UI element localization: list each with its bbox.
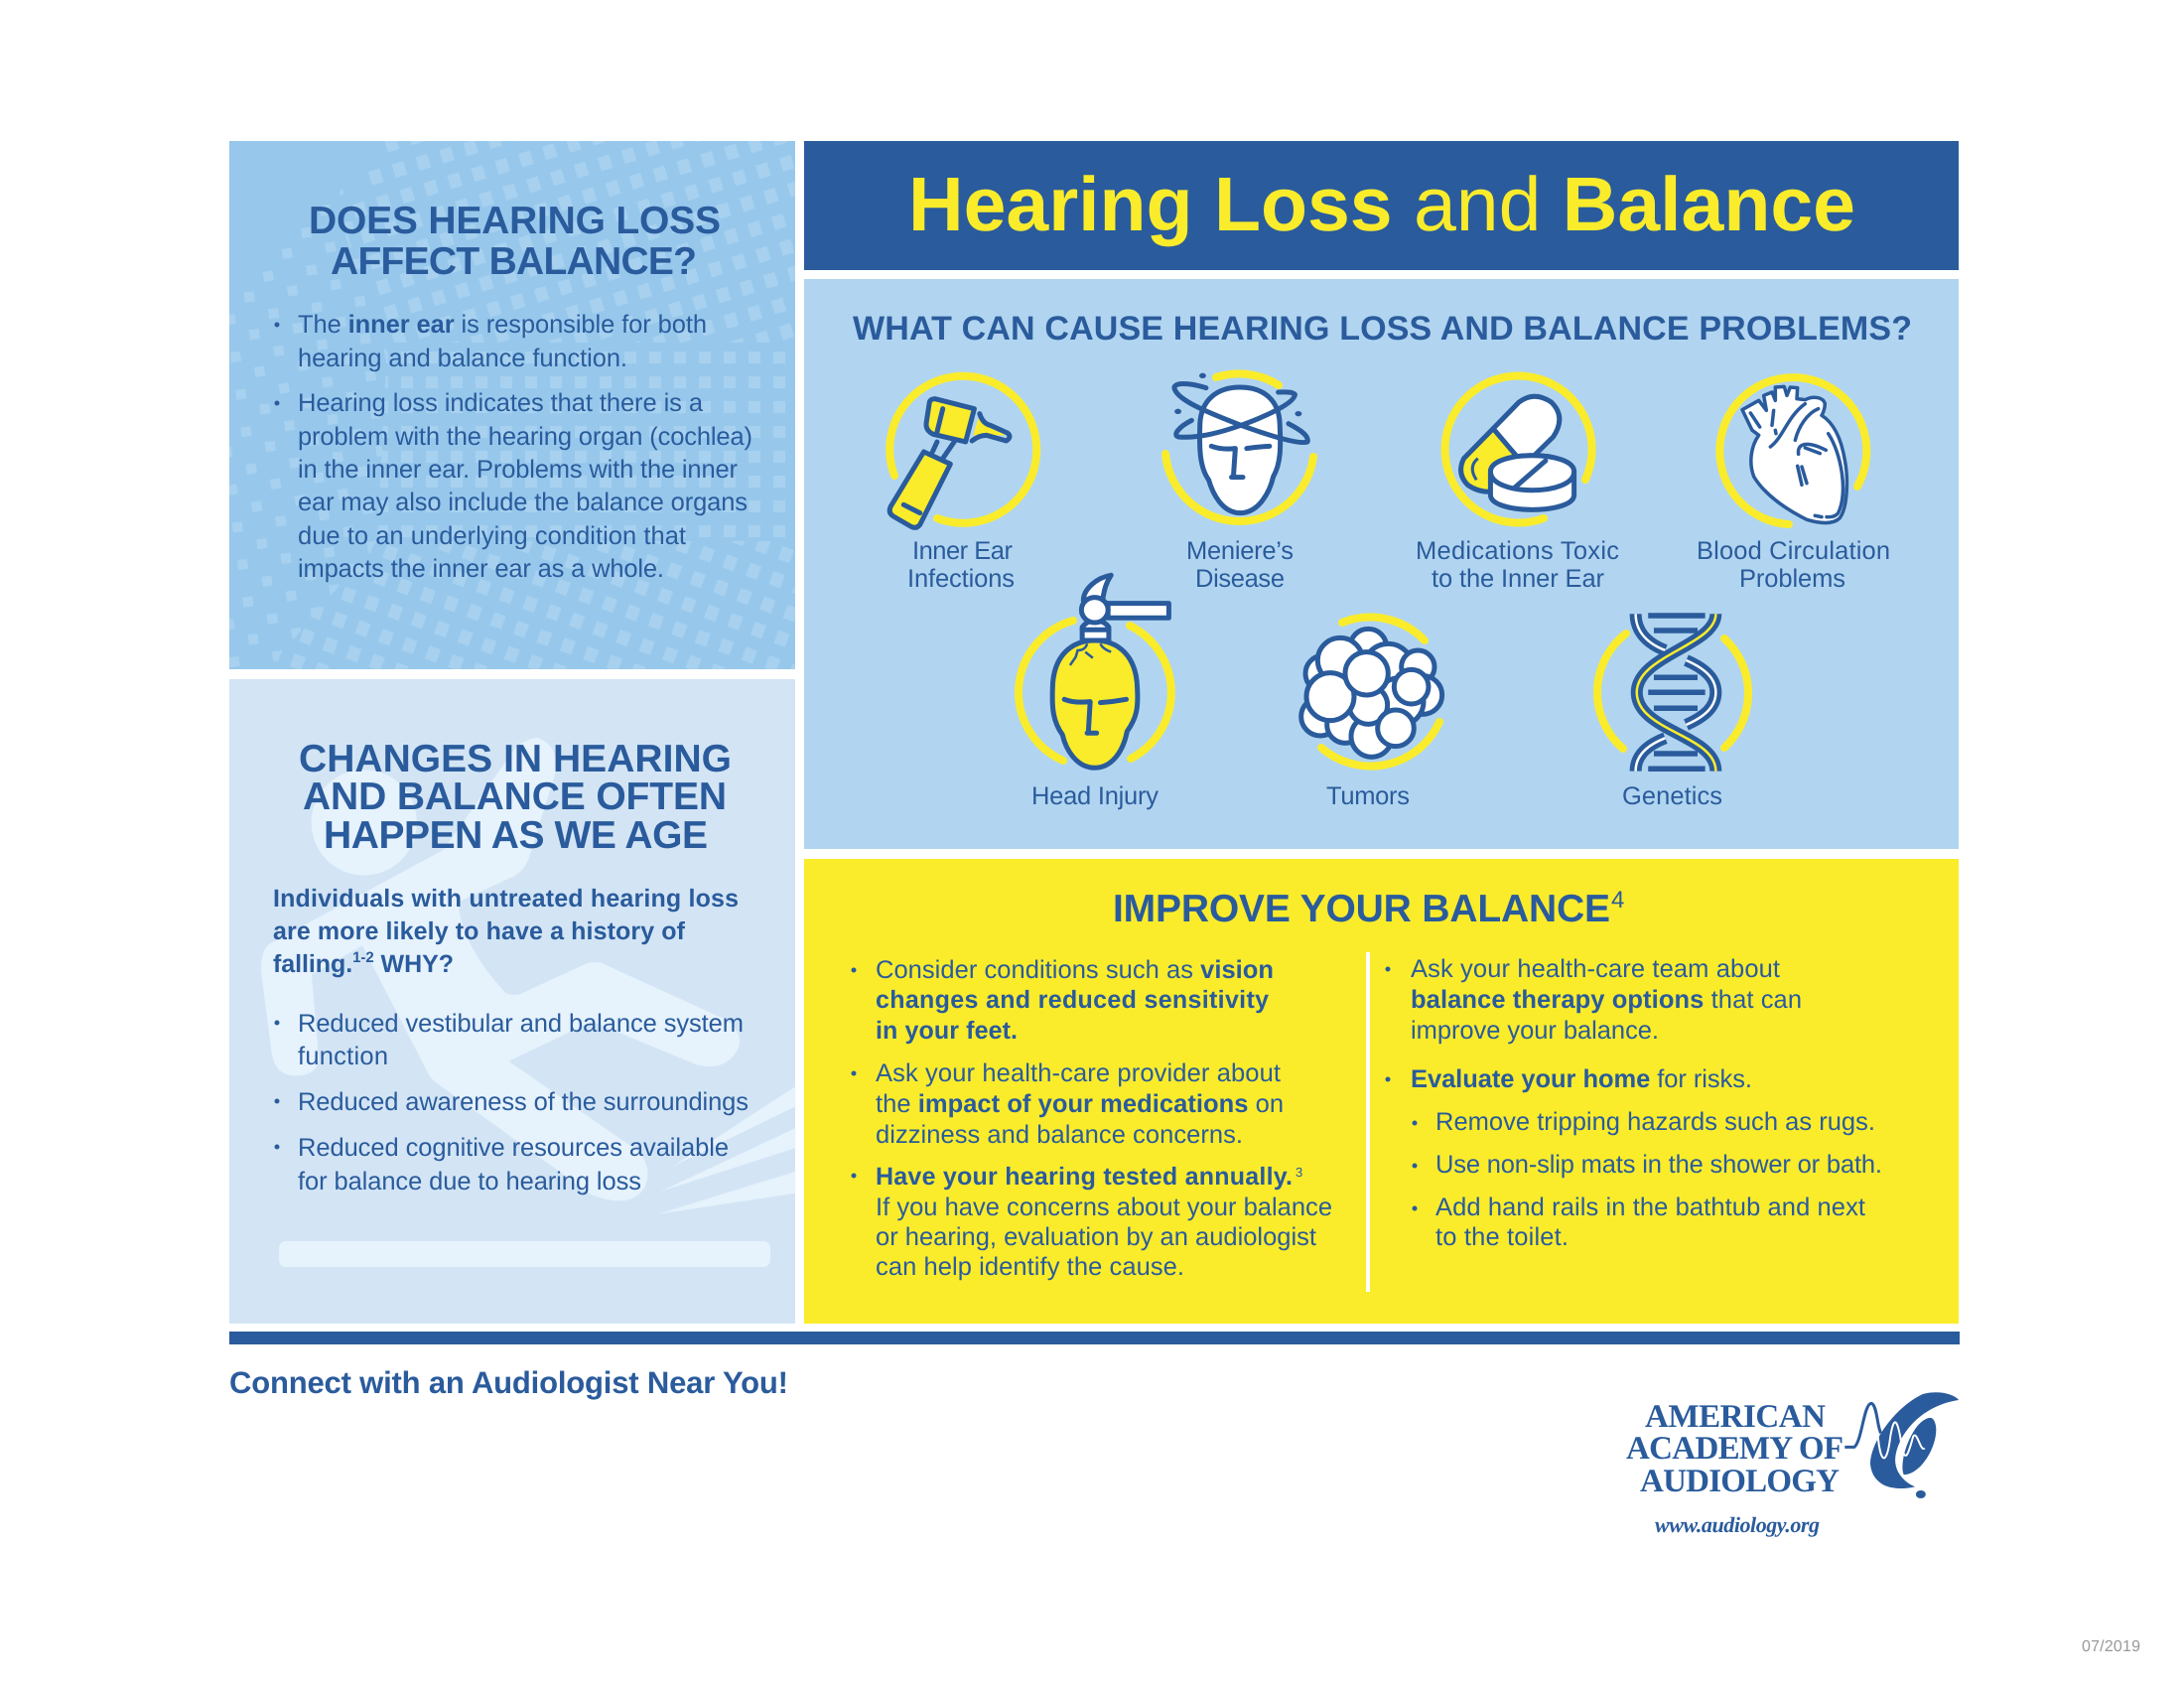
text block: left column bullets: Have your hearing tested annually.: [876, 1163, 1293, 1191]
text block: individuals with untreated hearing loss: WHY?: [374, 950, 454, 978]
text block: right column bullets: Add hand rails in the bathtub and next: [1435, 1194, 1865, 1221]
text block: right column bullets: Use non-slip mats in the shower or bath.: [1435, 1151, 1882, 1179]
text block: left column bullets: [852, 956, 1332, 1281]
text block: right column bullets: balance therapy options that can: [1411, 986, 1802, 1014]
text block: left column bullets: Consider conditions such as vision: [876, 956, 1274, 984]
text block: right column bullets: [1386, 955, 1882, 1251]
heading: improve your balance: 4: [1611, 887, 1624, 914]
call to action: Connect with an Audiologist Near You!: [229, 1365, 788, 1400]
text block: left column bullets: If you have concerns about your balance: [876, 1194, 1332, 1221]
text block: left column bullets: can help identify the cause.: [876, 1253, 1184, 1281]
heading: changes in hearing: HAPPEN AS WE AGE: [324, 814, 708, 857]
heading: changes in hearing: AND BALANCE OFTEN: [303, 775, 727, 818]
text block: left column bullets: dizziness and balance concerns.: [876, 1121, 1243, 1149]
text block: inner ear bullets: ear may also include the balance organs: [298, 489, 748, 516]
text block: individuals with untreated hearing loss: [273, 885, 739, 978]
text block: reasons bullets: Reduced awareness of the surroundings: [298, 1088, 749, 1116]
text block: right column bullets: improve your balance.: [1411, 1017, 1659, 1045]
label: menieres disease: Meniere’s: [1186, 537, 1294, 565]
label: medications toxic: [1416, 537, 1619, 593]
text block: inner ear bullets: [274, 311, 752, 583]
label: inner ear infections: [907, 537, 1015, 593]
text block: inner ear bullets: The inner ear is responsible for both: [298, 311, 707, 339]
icon: head injury: [1019, 575, 1171, 768]
logo: american academy of audiology: AMERICAN: [1645, 1399, 1826, 1435]
text block: reasons bullets: Reduced cognitive resources available: [298, 1134, 729, 1162]
label: medications toxic: to the Inner Ear: [1432, 565, 1604, 593]
date stamp: 07/2019: [2082, 1638, 2140, 1655]
text block: left column bullets: the impact of your medications on: [876, 1090, 1284, 1118]
heading: does hearing loss: AFFECT BALANCE?: [331, 240, 697, 283]
heading: does hearing loss: [309, 200, 721, 283]
text block: left column bullets: or hearing, evaluation by an audiologist: [876, 1223, 1316, 1251]
icon: falling person background: [261, 738, 795, 1267]
text block: left column bullets: in your feet.: [876, 1017, 1018, 1045]
label: menieres disease: Disease: [1195, 565, 1285, 593]
text block: left column bullets: 3: [1296, 1165, 1302, 1180]
title banner: [804, 141, 1959, 270]
text block: inner ear bullets: in the inner ear. Problems with the inner: [298, 456, 739, 484]
label: blood circulation problems: Problems: [1739, 565, 1845, 593]
label: genetics: Genetics: [1622, 782, 1722, 810]
heading: improve your balance: IMPROVE YOUR BALANCE: [1113, 888, 1610, 930]
text block: left column bullets: Ask your health-care provider about: [876, 1059, 1281, 1087]
panel: improve your balance: [804, 859, 1959, 1324]
logo: american academy of audiology: AUDIOLOGY: [1640, 1464, 1840, 1499]
text block: left column bullets: changes and reduced sensitivity: [876, 986, 1269, 1014]
text block: right column bullets: Remove tripping hazards such as rugs.: [1435, 1108, 1875, 1136]
logo: american academy of audiology: [1626, 1392, 1959, 1537]
text block: individuals with untreated hearing loss: falling.: [273, 950, 352, 978]
text block: individuals with untreated hearing loss: 1-2: [352, 949, 374, 966]
icon: heart: [1719, 377, 1866, 524]
icon: dna: [1597, 614, 1748, 772]
text block: reasons bullets: for balance due to hearing loss: [298, 1168, 641, 1196]
heading: changes in hearing: [299, 738, 732, 857]
icon: otoscope: [889, 376, 1036, 527]
panel: changes in hearing and balance: [229, 679, 795, 1324]
text block: reasons bullets: function: [298, 1043, 388, 1070]
text block: inner ear bullets: Hearing loss indicates that there is a: [298, 389, 704, 417]
label: tumors: Tumors: [1326, 782, 1410, 810]
label: inner ear infections: Infections: [907, 565, 1015, 593]
logo: american academy of audiology: ACADEMY OF: [1626, 1431, 1843, 1467]
icon: tumors: [1301, 618, 1442, 767]
footer bar: [229, 1332, 1960, 1344]
heading: changes in hearing: CHANGES IN HEARING: [299, 738, 732, 780]
label: inner ear infections: Inner Ear: [912, 537, 1013, 565]
text block: reasons bullets: Reduced vestibular and balance system: [298, 1010, 744, 1038]
text block: right column bullets: Ask your health-care team about: [1411, 955, 1780, 983]
icon: dizzy head: [1165, 373, 1313, 521]
text block: inner ear bullets: hearing and balance function.: [298, 345, 627, 372]
text block: right column bullets: to the toilet.: [1435, 1223, 1569, 1251]
text block: individuals with untreated hearing loss: Individuals with untreated hearing loss: [273, 885, 739, 913]
text block: reasons bullets: [274, 1010, 749, 1196]
text block: inner ear bullets: problem with the hearing organ (cochlea): [298, 423, 752, 451]
panel: does hearing loss affect balance: [229, 141, 795, 669]
title banner: Hearing Loss and Balance: [908, 162, 1855, 247]
label: medications toxic: Medications Toxic: [1416, 537, 1619, 565]
icon: pills: [1445, 376, 1592, 523]
label: head injury: Head Injury: [1031, 782, 1159, 810]
label: menieres disease: [1186, 537, 1294, 593]
text block: individuals with untreated hearing loss: are more likely to have a history of: [273, 917, 686, 945]
label: blood circulation problems: [1697, 537, 1890, 593]
text block: right column bullets: Evaluate your home for risks.: [1411, 1065, 1752, 1093]
text block: inner ear bullets: due to an underlying condition that: [298, 522, 686, 550]
logo: american academy of audiology: www.audiology.org: [1655, 1512, 1820, 1537]
heading: does hearing loss: DOES HEARING LOSS: [309, 200, 721, 242]
panel: causes: [804, 279, 1959, 849]
heading: what can cause: WHAT CAN CAUSE HEARING LOSS AND BALANCE PROBLEMS?: [853, 310, 1912, 348]
text block: inner ear bullets: impacts the inner ear as a whole.: [298, 555, 664, 583]
label: blood circulation problems: Blood Circulation: [1697, 537, 1890, 565]
